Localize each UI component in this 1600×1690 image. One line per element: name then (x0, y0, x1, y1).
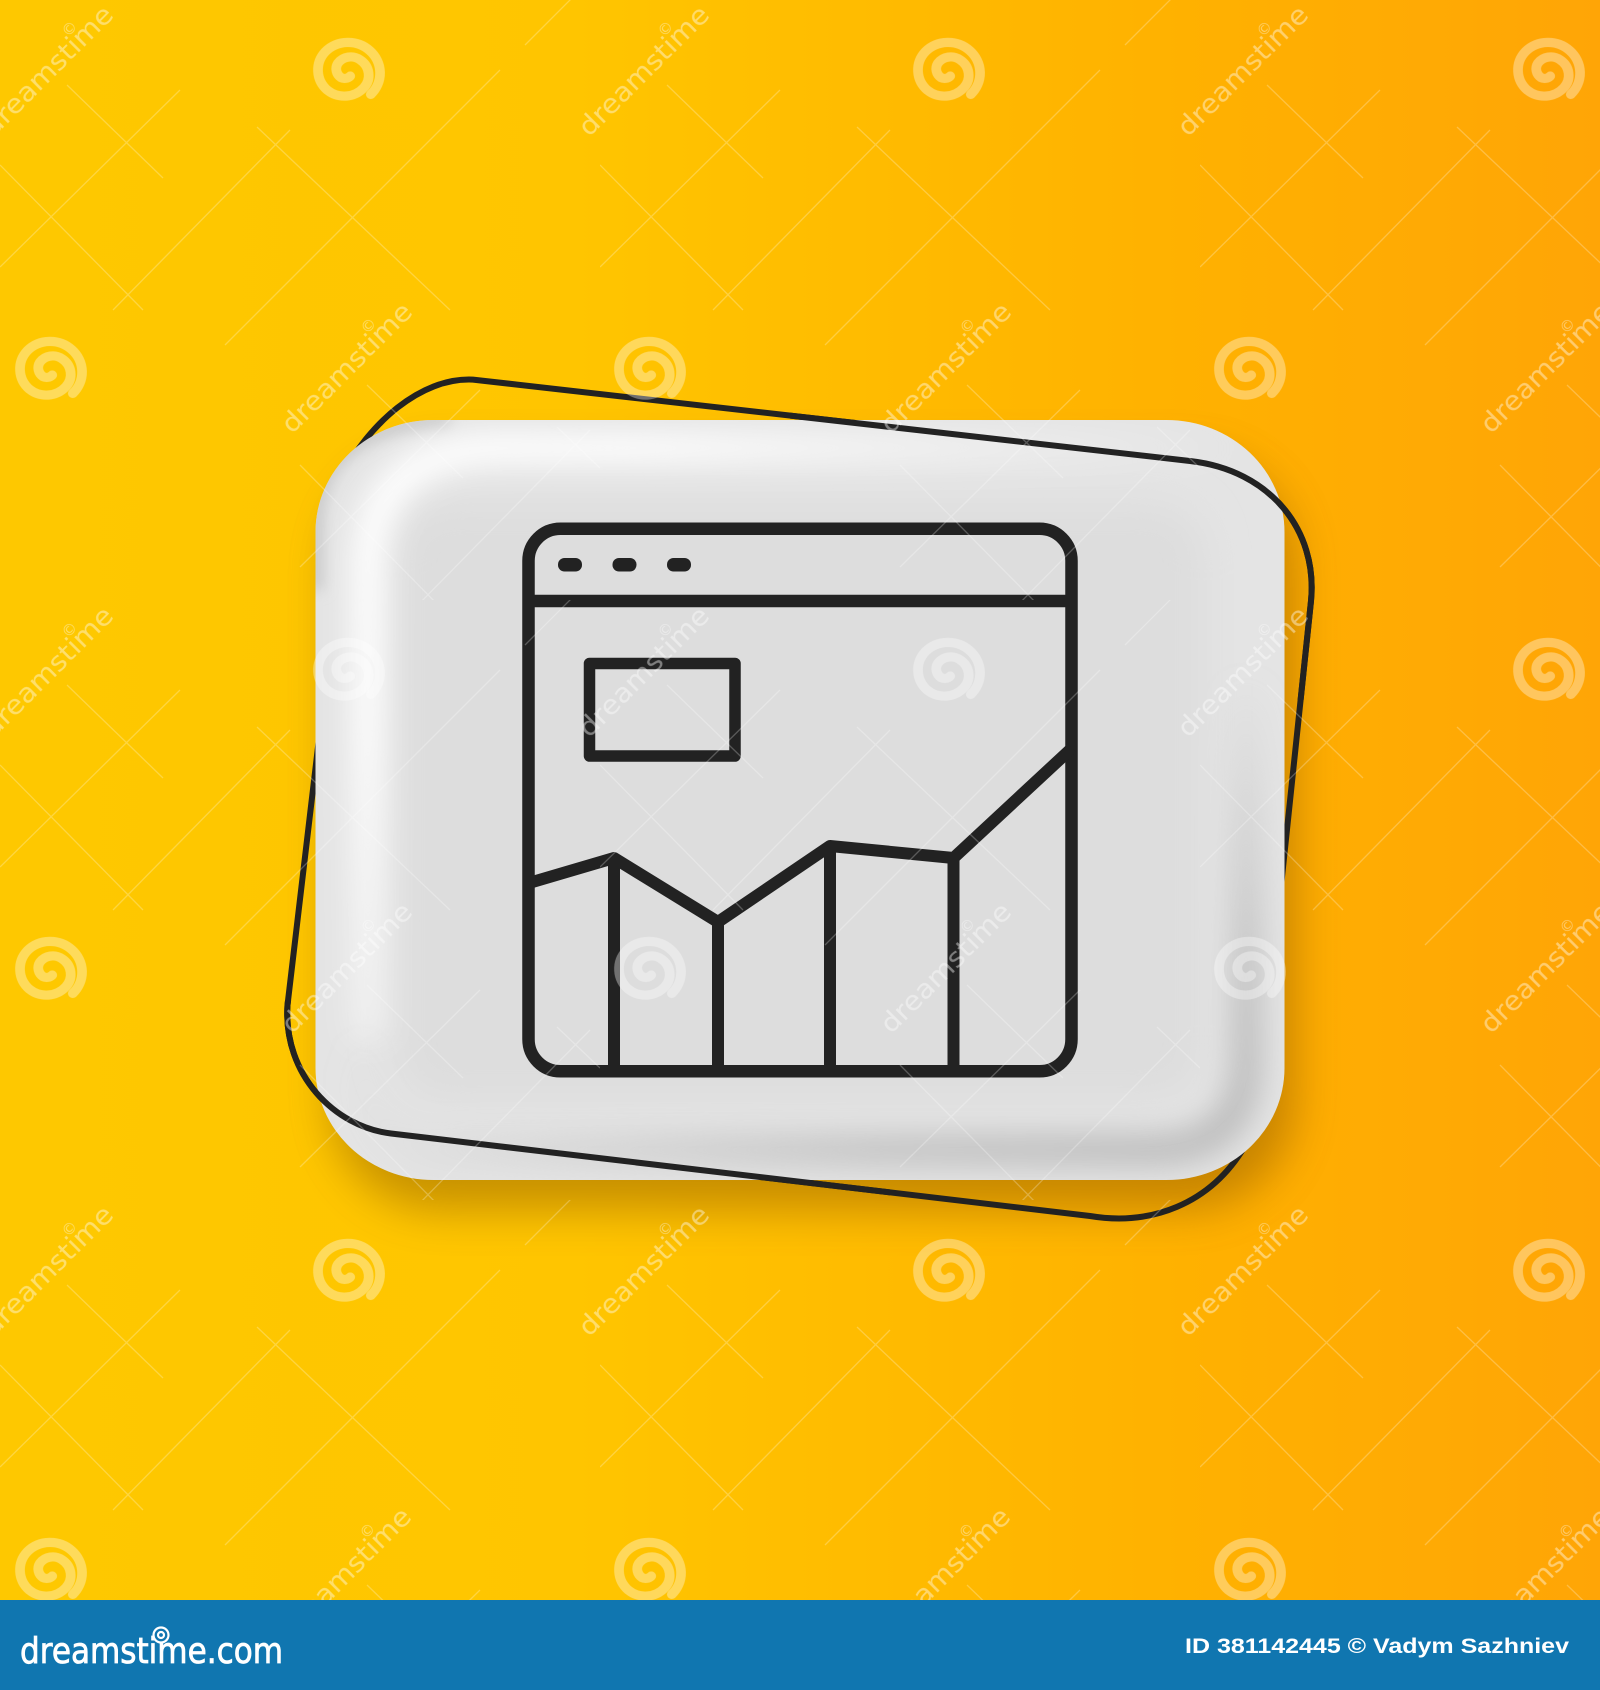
watermark text: dreamstime (874, 296, 1018, 440)
card interior (395, 505, 1205, 1100)
watermark text: © (654, 618, 677, 642)
watermark text: © (955, 1519, 978, 1543)
watermark text: © (357, 914, 380, 938)
watermark text: dreamstime (874, 896, 1018, 1040)
rotated frame outline over card: bottom left (284, 1000, 890, 1196)
watermark text: dreamstime (873, 1501, 1017, 1645)
small rectangle panel (590, 664, 735, 756)
watermark text: dreamstime (1171, 600, 1315, 744)
rotated frame outline over card: top right (790, 412, 1315, 700)
watermark text: © (956, 314, 979, 338)
watermark text: © (58, 618, 81, 642)
window outline (528, 529, 1072, 1071)
watermark text: © (58, 17, 81, 41)
rotated frame outline behind card (287, 379, 1312, 1218)
footer logo spiral (154, 1628, 168, 1642)
icon: browser window with chart (528, 529, 1072, 1072)
card bottom-right shaded band (528, 776, 1274, 1178)
footer credit text: ID 381142445 © Vadym Sazhniev (1185, 1634, 1569, 1658)
window title bar line (529, 595, 1072, 607)
watermark text: dreamstime (572, 0, 716, 143)
watermark text: © (1555, 1519, 1578, 1543)
watermark text: © (356, 1519, 379, 1543)
watermark text: © (1253, 17, 1276, 41)
watermark text: dreamstime (274, 1501, 418, 1645)
watermark text: © (654, 1217, 677, 1241)
footer logo text: dreamstime.com (20, 1631, 283, 1672)
footer banner (0, 1600, 1600, 1690)
watermark text: © (654, 17, 677, 41)
area chart line (529, 748, 1072, 922)
watermark text: dreamstime (572, 600, 716, 744)
watermark text: dreamstime (275, 896, 419, 1040)
title bar dots (558, 558, 691, 572)
chart vertical bars (614, 846, 954, 1072)
watermark text: © (1253, 618, 1276, 642)
card shadow (330, 455, 1295, 1210)
watermark text: © (58, 1217, 81, 1241)
panel: 3D white rounded card (316, 420, 1284, 1180)
card highlight (344, 424, 970, 1027)
watermark text: dreamstime (572, 1199, 716, 1343)
watermark text: dreamstime (1171, 0, 1315, 143)
watermark text: dreamstime (275, 296, 419, 440)
watermark text: © (1253, 1217, 1276, 1241)
watermark text: © (1556, 314, 1579, 338)
watermark text: dreamstime (1171, 1199, 1315, 1343)
card top-left edge shade (316, 420, 450, 590)
watermark text: © (956, 914, 979, 938)
watermark text: © (1556, 914, 1579, 938)
watermark text: © (357, 314, 380, 338)
